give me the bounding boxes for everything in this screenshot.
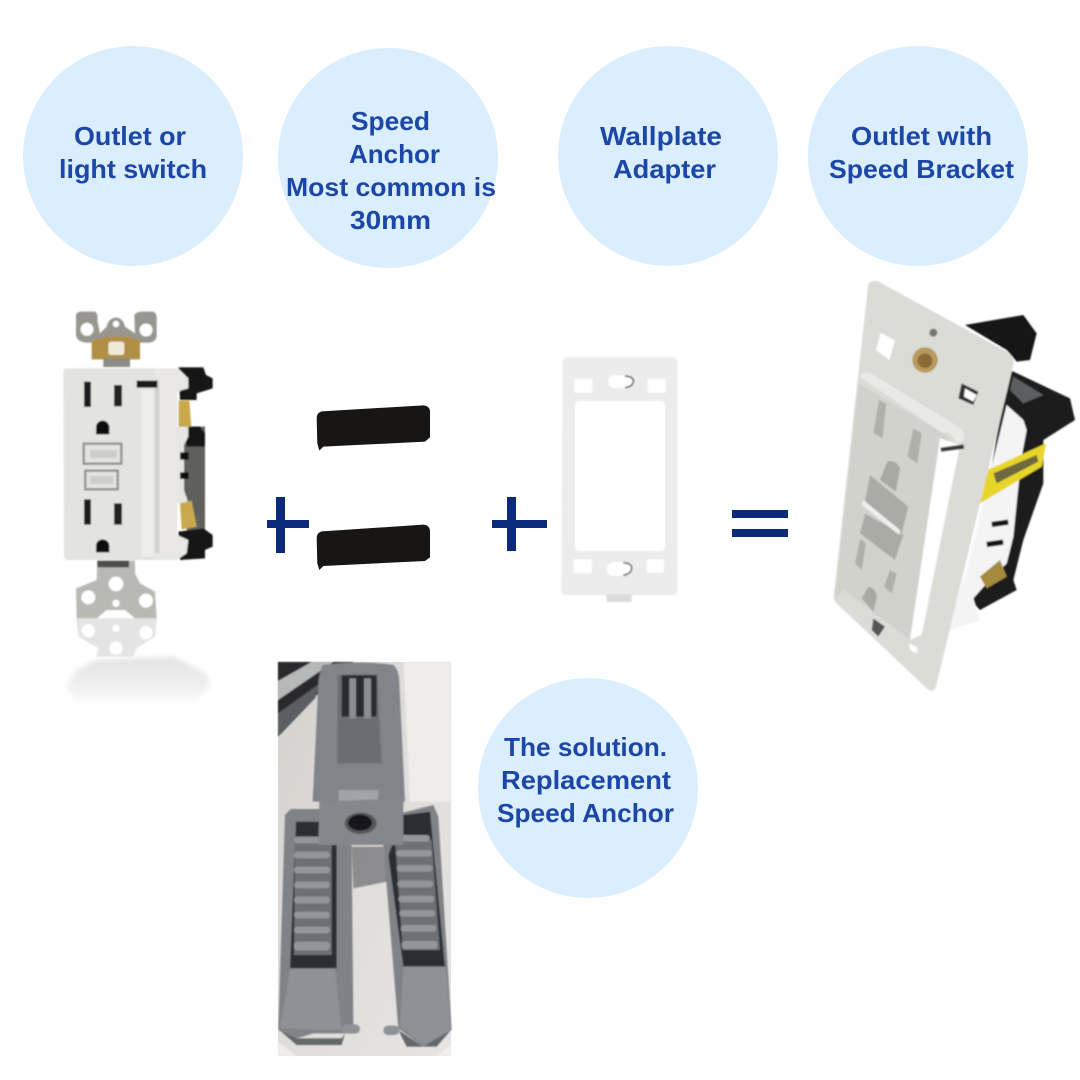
- photo: outlet with speed bracket: [834, 281, 1075, 691]
- label: outlet with speed bracket: Outlet with: [851, 121, 992, 151]
- icon: plus sign: [267, 497, 309, 553]
- label: wallplate adapter: [558, 46, 778, 266]
- label: speed anchor: Anchor: [349, 139, 440, 169]
- photo: speed anchors: [317, 405, 430, 570]
- icon: plus sign: [492, 497, 547, 551]
- label: outlet with speed bracket: Speed Bracket: [829, 154, 1014, 184]
- photo: outlet: [63, 312, 213, 702]
- label: the solution, replacement speed anchor: Replacement: [501, 765, 671, 795]
- label: wallplate adapter: Adapter: [613, 154, 716, 184]
- label: wallplate adapter: Wallplate: [600, 121, 722, 151]
- label: outlet or light switch: Outlet or: [74, 121, 186, 151]
- label: the solution, replacement speed anchor: The solution.: [504, 732, 667, 762]
- label: speed anchor: Most common is: [286, 172, 496, 202]
- label: the solution, replacement speed anchor: Speed Anchor: [497, 798, 674, 828]
- label: speed anchor: Speed: [351, 106, 430, 136]
- label: outlet or light switch: [23, 46, 243, 266]
- photo: replacement speed anchor: [278, 662, 452, 1056]
- label: outlet with speed bracket: [808, 46, 1028, 266]
- label: the solution, replacement speed anchor: [478, 678, 698, 898]
- photo: wallplate adapter: [561, 357, 677, 602]
- label: outlet or light switch: light switch: [59, 154, 207, 184]
- label: speed anchor: 30mm: [350, 205, 431, 235]
- label: speed anchor: [278, 48, 498, 268]
- icon: equals sign: [732, 510, 788, 537]
